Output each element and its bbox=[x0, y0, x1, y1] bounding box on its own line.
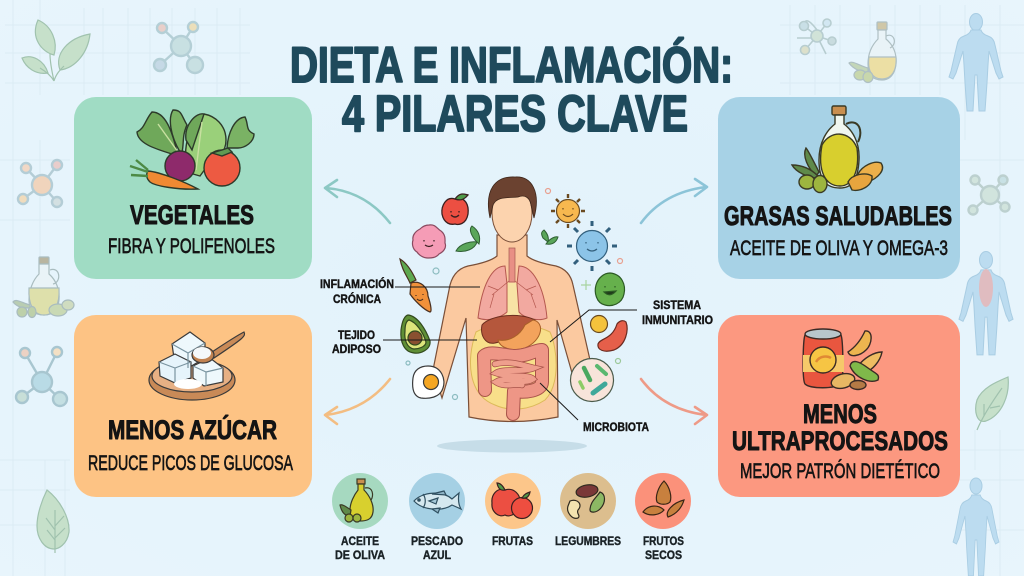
food item: legumbres: LEGUMBRES bbox=[555, 536, 621, 548]
arrow: to azucar bbox=[325, 379, 390, 424]
food item: legumbres bbox=[555, 473, 621, 548]
subtitle: aceite: ACEITE DE OLIVA Y OMEGA-3 bbox=[730, 237, 948, 260]
panel: menos ultraprocesados bbox=[718, 315, 960, 497]
label: tejido adiposo bbox=[332, 330, 477, 356]
microbe: orange bbox=[551, 194, 585, 228]
food item: aceite de oliva bbox=[332, 473, 388, 562]
icon: olive oil bottle bbox=[792, 106, 883, 192]
decor: human silhouette top right bbox=[949, 14, 1003, 111]
decor: leaves top left bbox=[22, 20, 90, 81]
arrow: to grasas bbox=[641, 179, 707, 223]
decor: human silhouette lower right bbox=[953, 478, 999, 576]
title: DIETA E INFLAMACIÓN: bbox=[290, 37, 733, 93]
icon: can and snacks bbox=[803, 329, 882, 391]
arrow: to vegetales bbox=[325, 180, 390, 223]
arrow: to ultraprocesados bbox=[641, 379, 707, 424]
title: 4 PILARES CLAVE bbox=[342, 85, 688, 142]
microbe: blue virus bbox=[567, 221, 617, 271]
food: pink cell bbox=[412, 225, 446, 258]
panel: grasas saludables bbox=[718, 97, 960, 279]
decor: molecule left bbox=[18, 160, 62, 207]
food: leaves bbox=[456, 226, 558, 252]
heading: vegetales: VEGETALES bbox=[130, 200, 254, 230]
stomach bbox=[498, 320, 541, 350]
subtitle: fibra: FIBRA Y POLIFENOLES bbox=[108, 235, 275, 258]
label: sistema inmunitario: SISTEMA bbox=[653, 300, 701, 312]
food item: frutos secos: FRUTOS bbox=[643, 536, 684, 548]
food: yellow circle bbox=[590, 316, 608, 332]
label: tejido adiposo: TEJIDO bbox=[338, 330, 375, 342]
food: carrot bbox=[400, 259, 431, 312]
food: avocado bbox=[401, 315, 430, 353]
abdominal fat bbox=[470, 324, 556, 409]
decor: molecule top left bbox=[154, 22, 203, 73]
panel: menos azucar bbox=[74, 315, 312, 497]
food item: pescado azul bbox=[409, 473, 465, 562]
label: sistema inmunitario bbox=[550, 300, 713, 342]
food: apple bbox=[442, 194, 468, 224]
food item: aceite de oliva: DE OLIVA bbox=[335, 550, 385, 562]
food item: pescado azul: PESCADO bbox=[411, 536, 463, 548]
icon: vegetables bbox=[130, 110, 254, 189]
food item: pescado azul: AZUL bbox=[423, 550, 451, 562]
decor: molecule top right bbox=[797, 19, 836, 54]
liver bbox=[482, 315, 535, 343]
food item: frutos secos: SECOS bbox=[645, 550, 682, 562]
microbe: green bbox=[595, 273, 624, 306]
subtitle: mejor patron: MEJOR PATRÓN DIETÉTICO bbox=[740, 460, 940, 483]
small intestine bbox=[495, 363, 534, 385]
decor: oil bottle left bbox=[13, 257, 74, 318]
shadow under body bbox=[437, 440, 587, 452]
food item: aceite de oliva: ACEITE bbox=[341, 536, 379, 548]
human body bbox=[433, 177, 590, 422]
label: inflamacion cronica: INFLAMACIÓN bbox=[320, 278, 394, 291]
decor: leaf lower left bbox=[37, 490, 69, 553]
heading: menos azucar: MENOS AZÚCAR bbox=[108, 414, 277, 445]
food: fried egg bbox=[413, 366, 444, 398]
title bbox=[290, 37, 733, 142]
label: inflamacion cronica bbox=[320, 278, 480, 306]
subtitle: reduce picos: REDUCE PICOS DE GLUCOSA bbox=[88, 452, 293, 475]
food: kidney bean bbox=[598, 321, 627, 351]
lungs bbox=[478, 266, 547, 320]
heading: menos: MENOS bbox=[803, 399, 877, 429]
small deco dots bbox=[406, 188, 622, 400]
lung center bbox=[507, 283, 519, 321]
decor: leaf right bbox=[976, 377, 1008, 430]
decor: molecule right bbox=[968, 176, 1010, 214]
food item: frutos secos bbox=[635, 473, 691, 562]
icon: microbiota circle bbox=[570, 358, 614, 402]
heading: ultraprocesados: ULTRAPROCESADOS bbox=[732, 426, 948, 456]
head bbox=[488, 177, 536, 242]
label: sistema inmunitario: INMUNITARIO bbox=[642, 315, 713, 327]
icon: sugar cubes on plate bbox=[149, 332, 245, 400]
food item: frutas: FRUTAS bbox=[492, 536, 533, 548]
large intestine bbox=[484, 350, 542, 414]
panel: vegetales bbox=[74, 97, 312, 279]
label: tejido adiposo: ADIPOSO bbox=[332, 344, 381, 356]
trachea bbox=[509, 248, 515, 282]
torso and arms bbox=[433, 235, 590, 422]
food item: frutas bbox=[485, 473, 541, 548]
label: microbiota: MICROBIOTA bbox=[583, 422, 649, 434]
decor: oil bottle top right bbox=[849, 22, 896, 82]
heading: grasas saludables: GRASAS SALUDABLES bbox=[724, 201, 952, 231]
decor: molecule lower left bbox=[16, 347, 67, 406]
label: inflamacion cronica: CRÓNICA bbox=[333, 293, 381, 306]
decor: human silhouette with organs right bbox=[959, 252, 1013, 355]
label: microbiota bbox=[540, 383, 649, 434]
